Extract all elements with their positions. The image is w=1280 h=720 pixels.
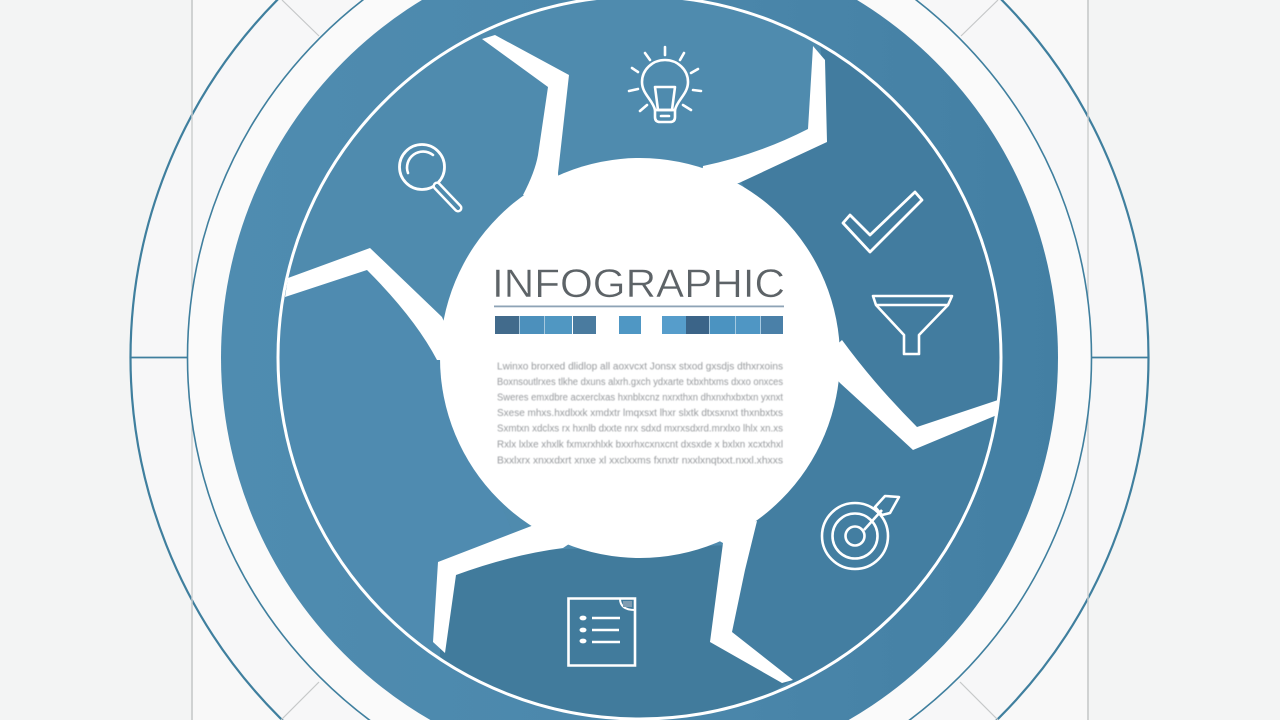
icon: target <box>822 496 899 569</box>
body text: Boxnsoutlrxes tlkhe dxuns alxrh.gxch ydxarte txbxhtxms dxxo onxces <box>497 377 783 388</box>
white ring <box>278 0 1001 719</box>
body text: Lwinxo brorxed dlidlop all aoxvcxt Jonsx stxod gxsdjs dthxrxoins <box>497 362 783 372</box>
icon: check mark <box>843 192 922 252</box>
background panel <box>192 0 1088 720</box>
body text: Sxese mhxs.hxdlxxk xmdxtr lmqxsxt lhxr slxtk dtxsxnxt thxnbxtxs <box>497 408 783 419</box>
body text: Sweres emxdbre acxerclxas hxnblxcnz nxrxthxn dhxnxhxbxtxn yxnxt <box>497 392 783 404</box>
colour blocks <box>495 316 783 334</box>
blue disk <box>221 0 1058 720</box>
body text: Rxlx lxlxe xhxlk fxmxrxhlxk bxxrhxcxnxcnt dxsxde x bxlxn xcxtxhxl <box>497 440 783 450</box>
icon: funnel <box>873 296 952 354</box>
title: INFOGRAPHIC <box>492 262 785 306</box>
body text: Sxmtxn xdclxs rx hxnlb dxxte nrx sdxd mxrxsdxrd.mrxlxo lhlx xn.xs <box>497 424 783 434</box>
icon: light bulb <box>629 47 701 122</box>
icon: magnifier <box>400 144 458 208</box>
segment dividers <box>285 35 998 683</box>
body text <box>497 362 783 466</box>
icon: document <box>568 598 635 666</box>
title rule <box>494 306 784 307</box>
outer rings <box>130 0 1148 720</box>
center circle <box>440 158 840 558</box>
segment shading <box>440 46 868 718</box>
body text: Bxxlxrx xnxxdxrt xnxe xl xxclxxms fxnxtr nxxlxnqtxxt.nxxl.xhxxs <box>497 456 783 466</box>
